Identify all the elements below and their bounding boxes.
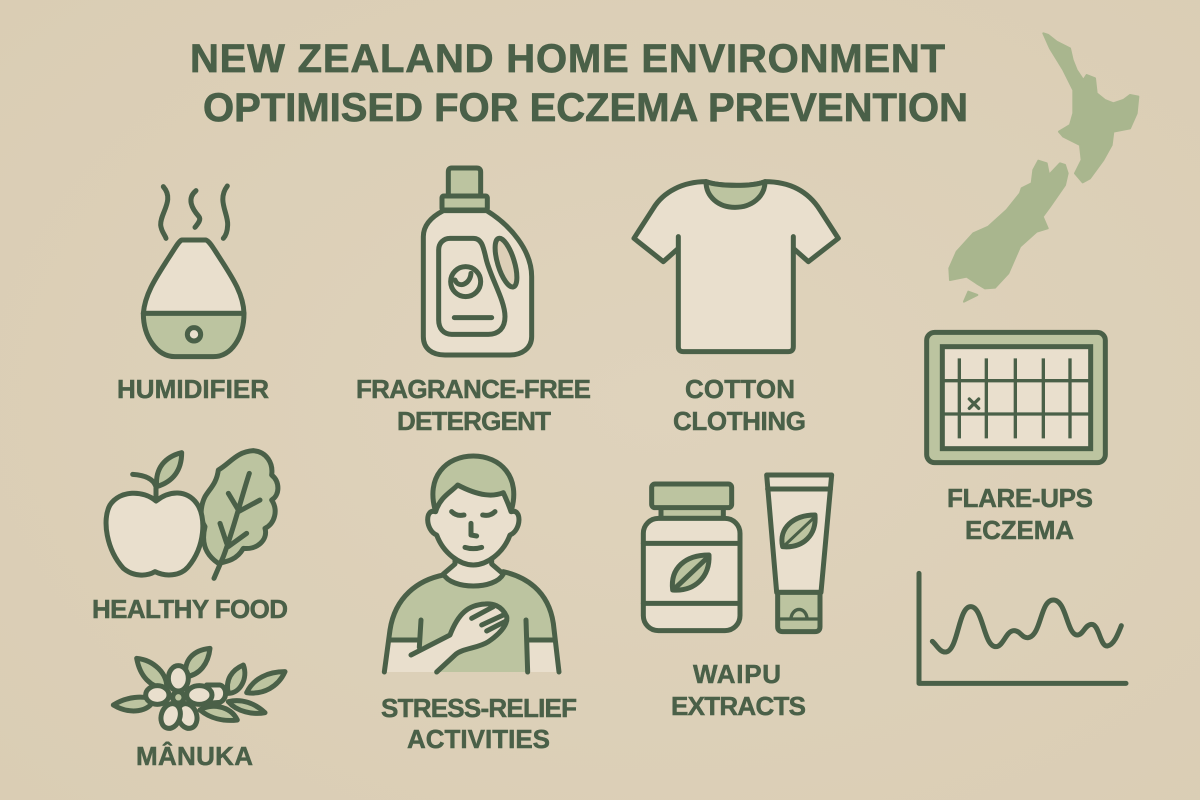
icon: calendar (927, 332, 1105, 463)
label: cotton clothing: COTTON (685, 374, 795, 404)
label: cotton clothing (673, 374, 806, 436)
panel: stress relief (381, 456, 577, 754)
label: humidifier: HUMIDIFIER (117, 374, 269, 404)
title: OPTIMISED FOR ECZEMA PREVENTION (203, 86, 968, 130)
label: healthy food: HEALTHY FOOD (92, 594, 288, 624)
panel: healthy food (92, 451, 288, 624)
label: waipu extracts: WAIPU (693, 659, 781, 689)
title (190, 37, 968, 130)
label: detergent (356, 374, 591, 436)
label: flare-ups eczema: FLARE-UPS (947, 483, 1093, 513)
label: detergent: FRAGRANCE-FREE (356, 374, 591, 404)
panel: manuka (113, 648, 285, 771)
icon: manuka flower (113, 648, 285, 731)
label: waipu extracts: EXTRACTS (671, 691, 806, 721)
label: stress relief (381, 693, 577, 754)
icon: apple and leafy green (106, 451, 278, 578)
panel: cotton clothing (634, 182, 838, 436)
panel: flare-ups (927, 332, 1105, 545)
label: waipu extracts (671, 659, 806, 721)
label: manuka: MÂNUKA (136, 741, 253, 771)
label: stress relief: ACTIVITIES (407, 724, 550, 754)
panel: waipu extracts (643, 475, 832, 721)
label: cotton clothing: CLOTHING (673, 406, 806, 436)
label: detergent: DETERGENT (397, 406, 551, 436)
line chart (919, 573, 1126, 683)
icon: humidifier (143, 186, 244, 357)
label: flare-ups eczema: ECZEMA (965, 515, 1074, 545)
panel: detergent (356, 168, 591, 436)
label: flare-ups eczema (947, 483, 1093, 545)
icon: calm person with hand on chest (384, 456, 559, 672)
icon: jar and tube (643, 475, 832, 632)
head (428, 456, 519, 586)
icon: t-shirt (634, 182, 838, 352)
panel: humidifier (117, 186, 269, 404)
title: NEW ZEALAND HOME ENVIRONMENT (190, 37, 945, 81)
torso and arm (384, 572, 559, 672)
label: stress relief: STRESS-RELIEF (381, 693, 577, 723)
icon: detergent bottle (423, 168, 532, 355)
map: New Zealand (949, 33, 1138, 302)
